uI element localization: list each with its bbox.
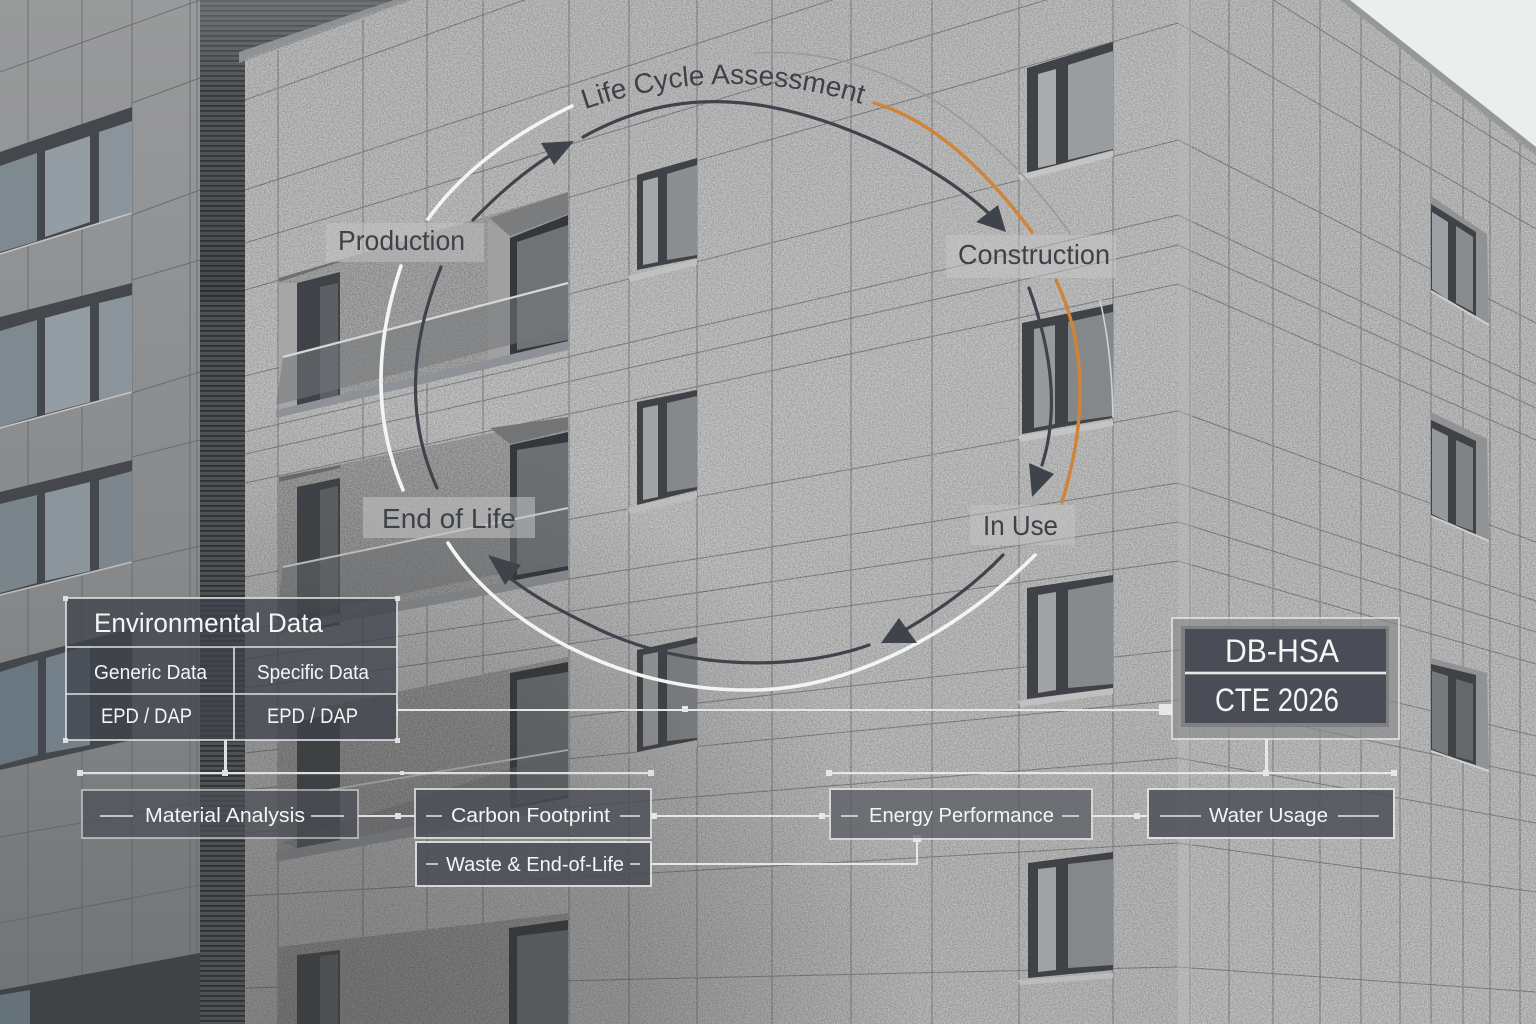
life cycle diagram — [381, 52, 1113, 690]
window row 3 — [0, 460, 132, 595]
box: Material Analysis — [82, 790, 358, 838]
box: Energy Performance — [830, 789, 1092, 839]
label: Construction: Construction — [958, 239, 1110, 270]
text: DB-HSA: DB-HSA — [1225, 633, 1340, 669]
white outer arc — [381, 106, 1035, 690]
box: Energy Performance: Energy Performance — [869, 804, 1054, 827]
box: Carbon Footprint: Carbon Footprint — [451, 804, 610, 827]
connector: horizontal link from data table to standards box — [396, 704, 1172, 716]
window row 4 — [0, 628, 132, 770]
orange arc — [874, 103, 1080, 502]
connector: Carbon Footprint to Energy Performance — [651, 813, 830, 819]
box: Carbon Footprint — [415, 789, 651, 838]
roof edge — [1340, 0, 1536, 156]
box: Material Analysis: Material Analysis — [145, 804, 305, 827]
recessed balcony bay 4 — [297, 920, 568, 1024]
connector: Waste to Energy Performance — [651, 836, 920, 864]
window row 1 — [0, 107, 132, 254]
panel: DB-HSA / CTE 2026 standards box — [1172, 618, 1399, 739]
label: In Use — [970, 505, 1075, 545]
heading: Environmental Data: Environmental Data — [94, 608, 324, 638]
label: End of Life: End of Life — [382, 503, 516, 534]
facade shading — [245, 0, 1192, 1024]
louvred dark strip between buildings — [200, 0, 400, 1024]
connector: right bracket bus — [826, 739, 1397, 776]
box: Water Usage: Water Usage — [1209, 804, 1328, 827]
label: Construction — [946, 235, 1116, 278]
label: End of Life — [363, 497, 535, 538]
windows: right column of main facade — [1018, 42, 1113, 985]
main facade — [239, 0, 1178, 1024]
windows: right facade — [1431, 196, 1489, 771]
cell: EPD / DAP generic: EPD / DAP — [101, 705, 192, 728]
connector: Material Analysis to Carbon Footprint — [358, 813, 415, 819]
diagram title: Life Cycle Assessment: Life Cycle Assessment — [581, 64, 866, 108]
left neighbouring building — [0, 0, 200, 1024]
box: Waste and End-of-Life — [416, 842, 651, 886]
recessed balcony bay 1 — [276, 192, 568, 418]
roof cap — [239, 0, 412, 63]
label: Production: Production — [338, 225, 465, 256]
connector: left bracket bus — [77, 740, 654, 776]
cell: Specific Data: Specific Data — [257, 661, 370, 684]
window row 2 — [0, 283, 132, 428]
panel: Environmental Data table — [63, 596, 400, 743]
box: Waste and End-of-Life: Waste & End-of-Life — [446, 853, 624, 876]
arrowheads — [488, 141, 1054, 643]
label: In Use: In Use — [983, 510, 1058, 541]
dark base band — [0, 953, 200, 1024]
connector: Energy Performance to Water Usage — [1092, 813, 1148, 819]
recessed balcony walls — [279, 192, 568, 1024]
thin grey outer arc — [754, 52, 1113, 417]
recessed balcony bay 2 — [276, 417, 568, 634]
text: CTE 2026: CTE 2026 — [1215, 682, 1339, 718]
cell: EPD / DAP specific: EPD / DAP — [267, 705, 358, 728]
box: Water Usage — [1148, 789, 1394, 838]
recessed balcony bay 3 — [276, 662, 568, 862]
cell: Generic Data: Generic Data — [94, 661, 208, 684]
right facade — [1178, 0, 1536, 1024]
label: Production — [326, 223, 484, 262]
dark flow arrows — [415, 102, 1051, 663]
windows: centre column — [628, 158, 697, 759]
